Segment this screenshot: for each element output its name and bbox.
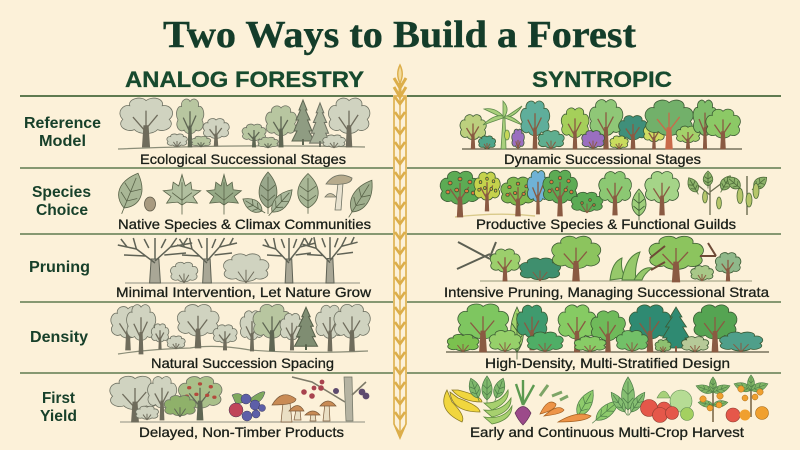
caption: Delayed, Non-Timber Products [139,424,344,440]
row label [24,115,101,150]
row 4 left: density [30,304,370,371]
row label: Density [30,329,88,346]
illustration: native leaves, acorn, mushroom [111,169,379,222]
icon: yellow bananas [444,390,482,422]
illustration: multi-stratified dense planting [446,304,769,360]
row label: Species [32,184,91,201]
icon: mushrooms [272,395,336,422]
illustration: spaced natural trees [111,304,370,354]
caption: Dynamic Successional Stages [504,151,701,167]
row label [40,390,77,425]
row 4 right: high density [446,304,769,371]
icon: orange trees and fruit [695,375,769,422]
illustration: unpruned bare trees [118,237,360,283]
illustration: sketched successional trees [118,98,370,149]
row label: Yield [40,408,77,425]
caption: High-Density, Multi-Stratified Design [485,355,730,371]
caption: Productive Species & Functional Guilds [476,216,736,232]
illustration: fruit trees and legumes [440,170,770,220]
row label: Model [39,133,86,150]
row label: Choice [36,202,88,219]
row 5 left: first yield [40,376,369,440]
row 1 left: reference model [24,98,370,167]
icon: pod plant [685,171,735,215]
row 2 left: species choice [32,169,379,232]
heading: analog forestry: ANALOG FORESTRY [125,67,364,92]
row label: Reference [24,115,101,132]
icon: greens [466,376,508,404]
icon: leafy greens [608,377,648,418]
caption: Early and Continuous Multi-Crop Harvest [470,424,744,440]
row 3 right: intensive pruning [444,236,769,300]
central wheat divider [394,65,406,438]
row label [32,184,91,219]
caption: Minimal Intervention, Let Nature Grow [116,284,372,300]
illustration: trees, berries, mushrooms [110,376,369,422]
icon: beet [515,380,534,425]
row label: Pruning [29,259,90,276]
row 1 right: dynamic stages [460,100,742,167]
caption: Intensive Pruning, Managing Successional Strata [444,284,769,300]
icon: fruiting bough [292,377,369,421]
illustration: pruned shrubs and trees [480,236,752,282]
illustration: coloured successional trees [460,100,742,149]
row 2 right: productive species [440,170,770,232]
caption: Natural Succession Spacing [151,355,334,371]
icon: tomatoes, cabbage and apple [640,390,694,422]
icon: banana palm [483,101,522,149]
heading: syntropic: SYNTROPIC [532,67,672,92]
row label: First [42,390,76,407]
icon: carrots and leaves [540,385,623,428]
row 3 left: pruning [29,237,372,300]
icon: pruning shears [457,242,496,269]
row 5 right: harvest [444,375,769,440]
caption: Ecological Successional Stages [140,151,346,167]
icon: berries [229,392,266,421]
caption: Native Species & Climax Communities [118,216,371,232]
icon: green bananas [484,390,512,424]
title: Two Ways to Build a Forest [163,14,636,56]
illustration: crops, fruit, vegetables [444,375,769,428]
